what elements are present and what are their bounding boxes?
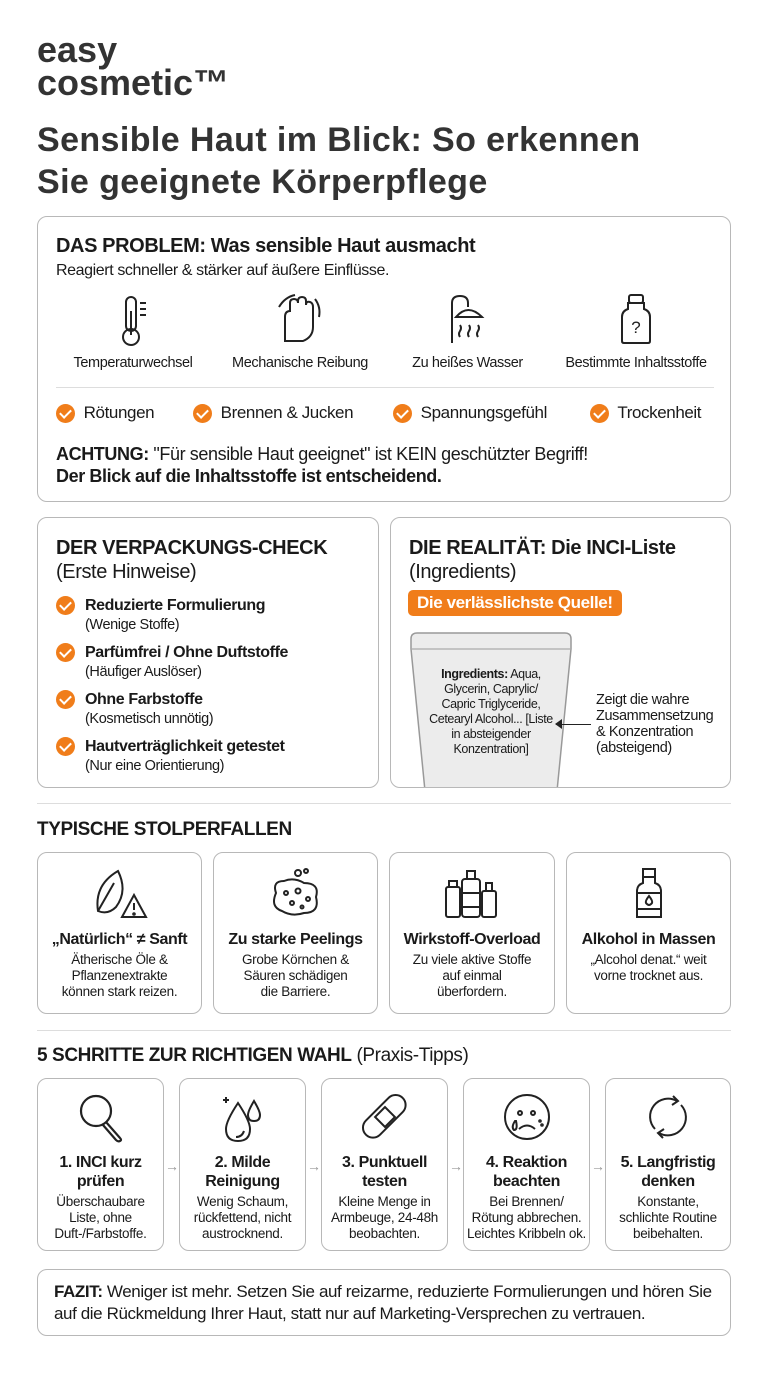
callout text: & Konzentration: [596, 724, 693, 740]
heading packaging: DER VERPACKUNGS-CHECK: [56, 537, 327, 559]
card: natuerlich: Pflanzenextrakte: [72, 968, 167, 983]
card: natuerlich: „Natürlich“ ≠ Sanft: [52, 931, 187, 948]
symptoms checks: Rötungen: [84, 403, 154, 422]
heading problem: DAS PROBLEM: Was sensible Haut ausmacht: [56, 235, 475, 257]
checklist: (Wenige Stoffe): [85, 617, 179, 633]
icon: shower: [451, 295, 484, 343]
card: natuerlich: [37, 852, 202, 1014]
step 4: beachten: [493, 1173, 560, 1190]
card: peelings: [213, 852, 378, 1014]
tube with ingredients: [410, 632, 572, 787]
checklist: (Häufiger Auslöser): [85, 664, 202, 680]
step 4: Bei Brennen/: [489, 1194, 564, 1209]
callout text: [596, 692, 713, 756]
step 1: 1. INCI kurz: [59, 1154, 142, 1171]
card: overload: [389, 852, 555, 1014]
step 1: Überschaubare: [56, 1194, 145, 1209]
step 2: rückfettend, nicht: [194, 1210, 291, 1225]
step 1: [37, 1078, 164, 1251]
card: natuerlich: Ätherische Öle &: [71, 952, 168, 967]
step 5: Konstante,: [637, 1194, 699, 1209]
icon: alcohol bottle: [636, 868, 662, 918]
callout text: Zeigt die wahre: [596, 692, 689, 708]
card: overload: Wirkstoff-Overload: [404, 931, 540, 948]
icon: bottle question: ?: [631, 318, 641, 337]
warning text: Der Blick auf die Inhaltsstoffe ist entscheidend.: [56, 466, 442, 486]
step 1: prüfen: [77, 1173, 124, 1190]
checklist: Hautverträglichkeit getestet: [85, 738, 285, 755]
callout text: Zusammensetzung: [596, 708, 713, 724]
arrow 1: →: [165, 1158, 179, 1174]
icon labels: [74, 355, 707, 371]
card: peelings: die Barriere.: [261, 984, 330, 999]
icon: friction hand: [278, 294, 320, 342]
icon: plaster: [362, 1094, 407, 1139]
icon: magnifier: [80, 1094, 122, 1142]
step 3: [321, 1078, 448, 1251]
icons row: Temperaturwechsel: [74, 355, 192, 371]
step 5: schlichte Routine: [619, 1210, 717, 1225]
card: alkohol: vorne trocknet aus.: [594, 968, 703, 983]
orange badge: Die verlässlichste Quelle!: [417, 593, 613, 612]
checklist: Parfümfrei / Ohne Duftstoffe: [85, 644, 288, 661]
icons row: Zu heißes Wasser: [412, 355, 523, 371]
step 2: Wenig Schaum,: [197, 1194, 288, 1209]
warning text: ACHTUNG: "Für sensible Haut geeignet" ist KEIN geschützter Begriff!: [56, 444, 588, 464]
logo: [37, 29, 229, 103]
card: alkohol: [566, 852, 731, 1014]
step 2: Reinigung: [205, 1173, 280, 1190]
card: peelings: Säuren schädigen: [243, 968, 348, 983]
icons row: Mechanische Reibung: [232, 355, 368, 371]
logo: cosmetic™: [37, 62, 229, 103]
step 2: 2. Milde: [215, 1154, 270, 1171]
subtitle: Reagiert schneller & stärker auf äußere Einflüsse.: [56, 262, 389, 279]
heading INCI: (Ingredients): [409, 561, 516, 583]
orange badge: [408, 590, 622, 616]
icon: thermometer: [122, 296, 146, 346]
step 4: 4. Reaktion: [486, 1154, 567, 1171]
panel: INCI: [390, 517, 731, 788]
title: Sie geeignete Körperpflege: [37, 163, 488, 201]
heading pitfalls: TYPISCHE STOLPERFALLEN: [37, 819, 292, 840]
heading INCI: DIE REALITÄT: Die INCI-Liste: [409, 537, 676, 559]
card: overload: Zu viele aktive Stoffe: [413, 952, 531, 967]
step 2: austrocknend.: [202, 1226, 283, 1241]
card: alkohol: Alkohol in Massen: [582, 931, 715, 948]
callout text: (absteigend): [596, 740, 672, 756]
warning text: [56, 444, 588, 486]
arrow 4: →: [591, 1158, 605, 1174]
heading packaging: (Erste Hinweise): [56, 561, 196, 583]
step 4: Rötung abbrechen.: [472, 1210, 581, 1225]
icons row: [74, 294, 707, 371]
step 5: 5. Langfristig: [621, 1154, 715, 1171]
icon: drops: [223, 1097, 261, 1142]
checklist: (Kosmetisch unnötig): [85, 711, 213, 727]
panel: packaging check: [37, 517, 379, 788]
step 5: [605, 1078, 731, 1251]
icons row: Bestimmte Inhaltsstoffe: [565, 355, 707, 371]
fazit box: FAZIT: Weniger ist mehr. Setzen Sie auf reizarme, reduzierte Formulierungen und hören Sie auf die Rückmeldung Ihrer Haut, statt nur auf Marketing-Versprechen zu vertrauen.: [54, 1282, 712, 1323]
card: overload: auf einmal: [442, 968, 502, 983]
step 4: Leichtes Kribbeln ok.: [467, 1226, 586, 1241]
card: overload: überfordern.: [437, 984, 507, 999]
icon: leaf warning: [96, 870, 148, 918]
heading INCI: [409, 536, 676, 583]
step 5: denken: [641, 1173, 695, 1190]
checklist: Reduzierte Formulierung: [85, 597, 265, 614]
step 3: Kleine Menge in: [338, 1194, 431, 1209]
fazit box: [37, 1269, 731, 1336]
symptoms checks: Trockenheit: [617, 403, 701, 422]
step 3: Armbeuge, 24-48h: [331, 1210, 438, 1225]
symptoms checks: [56, 403, 702, 423]
card: alkohol: „Alcohol denat.“ weit: [590, 952, 706, 967]
heading packaging: [56, 537, 328, 583]
step 4: [463, 1078, 590, 1251]
card: peelings: Zu starke Peelings: [228, 931, 363, 948]
step 5: beibehalten.: [633, 1226, 703, 1241]
title: Sensible Haut im Blick: So erkennen: [37, 121, 641, 159]
title: [37, 121, 641, 201]
logo: easy: [37, 29, 117, 70]
step 2: [179, 1078, 306, 1251]
heading steps: 5 SCHRITTE ZUR RICHTIGEN WAHL (Praxis-Tipps): [37, 1045, 468, 1066]
symptoms checks: Brennen & Jucken: [221, 403, 353, 422]
checklist: [56, 596, 288, 774]
step 1: Duft-/Farbstoffe.: [54, 1226, 147, 1241]
step 3: testen: [362, 1173, 407, 1190]
card: natuerlich: können stark reizen.: [62, 984, 177, 999]
icon: sad face: [504, 1094, 550, 1140]
card: peelings: Grobe Körnchen &: [242, 952, 349, 967]
arrow 2: →: [307, 1158, 321, 1174]
step 3: beobachten.: [349, 1226, 420, 1241]
symptoms checks: Spannungsgefühl: [421, 403, 547, 422]
icon: sponge: [273, 868, 318, 916]
icon: cycle: [649, 1095, 687, 1139]
icon: bottle question: [621, 294, 651, 344]
tube with ingredients: Ingredients: Aqua, Glycerin, Caprylic/ Capric Triglyceride, Cetearyl Alcohol... [Liste in absteigender Konzentration]: [429, 667, 553, 756]
arrow 3: →: [449, 1158, 463, 1174]
checklist: (Nur eine Orientierung): [85, 758, 224, 774]
icon: bottles: [445, 870, 497, 918]
step 1: Liste, ohne: [69, 1210, 132, 1225]
arrow: [556, 724, 591, 725]
step 3: 3. Punktuell: [342, 1154, 427, 1171]
checklist: Ohne Farbstoffe: [85, 691, 203, 708]
panel: problem: [37, 216, 731, 502]
